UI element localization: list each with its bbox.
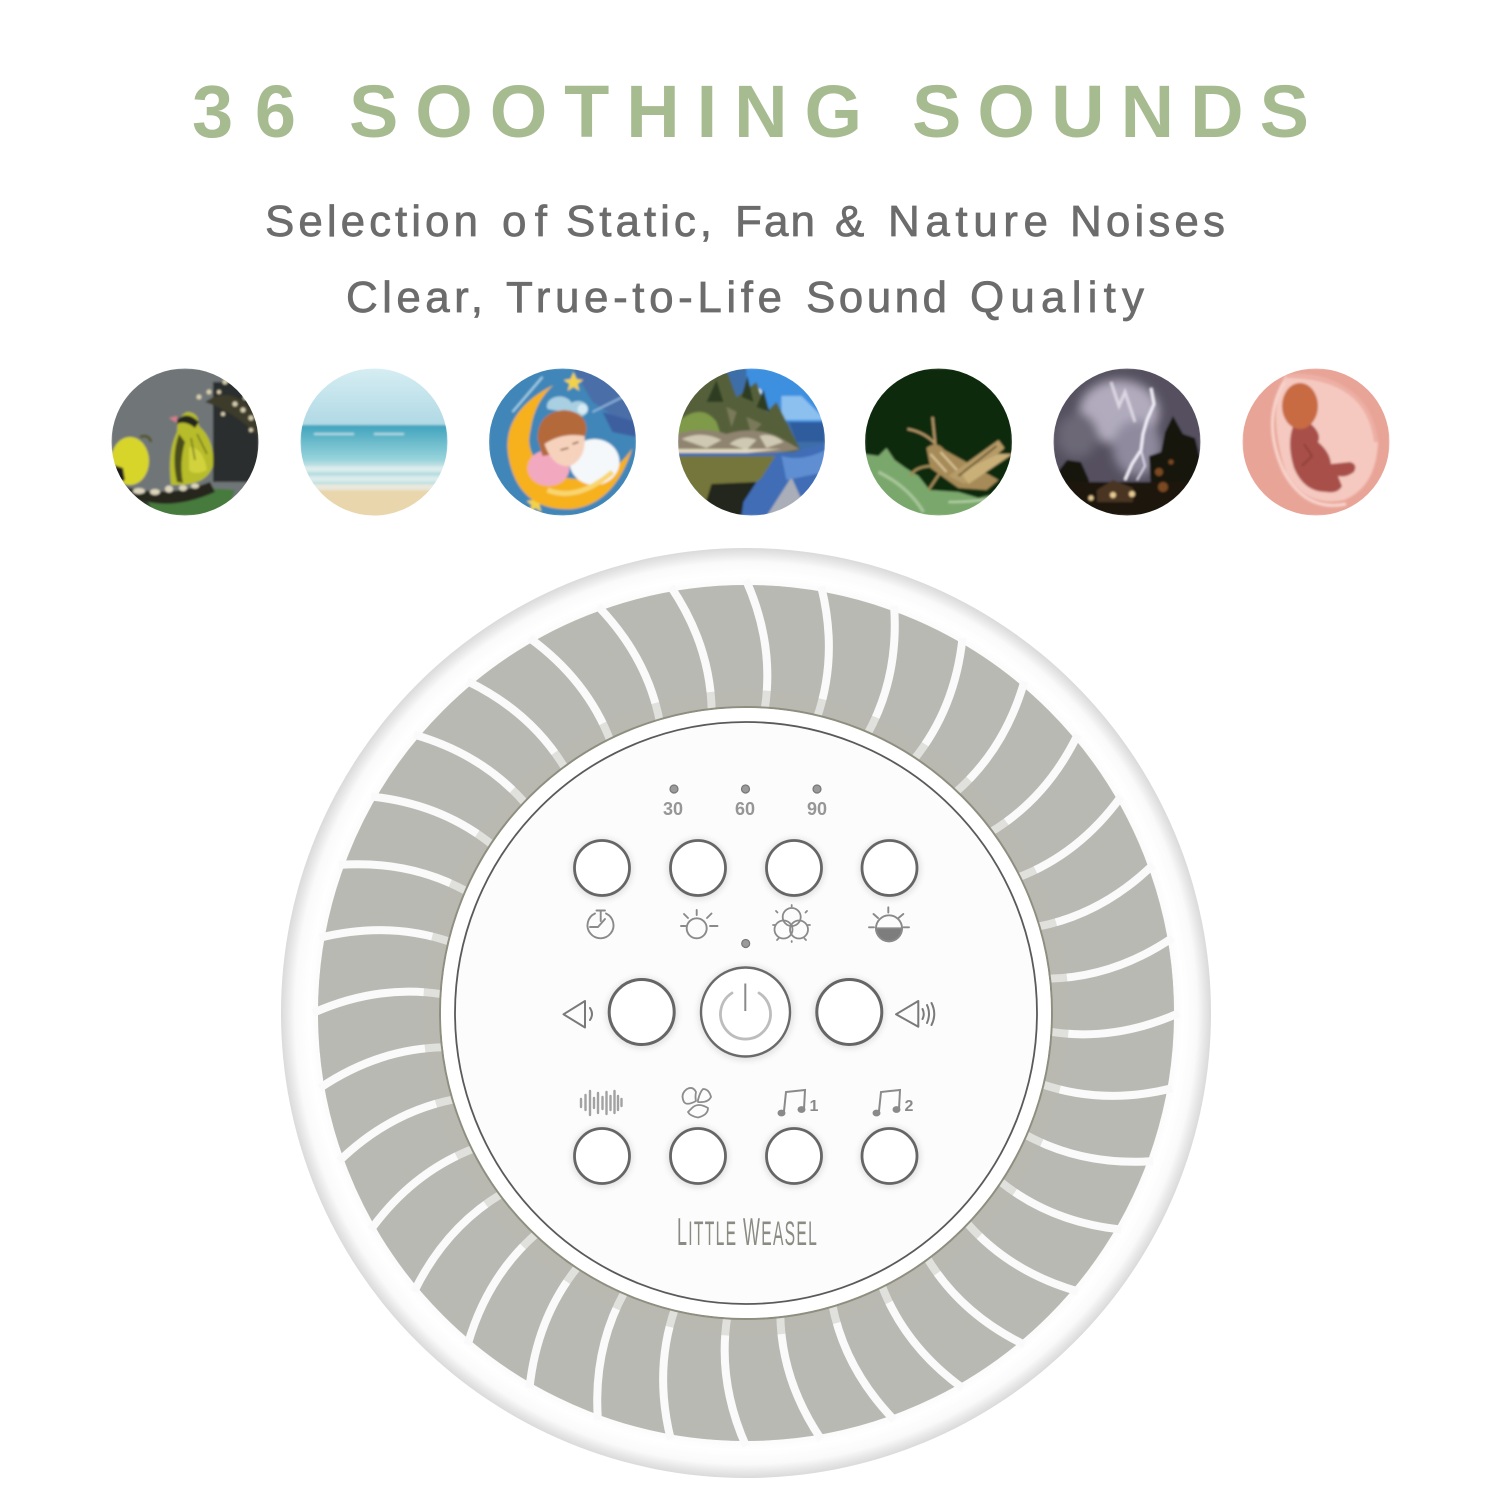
subtitle: selection of noises: Static, xyxy=(566,197,712,246)
subtitle: selection of noises: Fan xyxy=(735,197,815,246)
photo: beach xyxy=(300,368,448,518)
subtitle: sound quality: Quality xyxy=(970,273,1144,322)
icon: sound wave xyxy=(581,1091,622,1115)
timer indicator lights xyxy=(670,785,821,948)
icon: volume down xyxy=(564,1001,592,1028)
product: white noise machine xyxy=(281,548,1211,1478)
icon: fan xyxy=(683,1088,711,1118)
timer labels: 90 xyxy=(807,799,827,819)
top row buttons xyxy=(574,840,917,896)
icon: brightness sun xyxy=(681,910,718,938)
power button xyxy=(701,968,790,1056)
timer labels: 30 xyxy=(663,799,683,819)
photo: baby sleeping on the moon xyxy=(488,368,636,516)
title: SOUNDS xyxy=(912,70,1309,153)
photo: birds xyxy=(111,368,259,516)
icon: music 2: 2 xyxy=(905,1098,914,1115)
timer labels: 60 xyxy=(735,799,755,819)
icon: music 1: 1 xyxy=(810,1098,819,1115)
subtitle: sound quality: Sound xyxy=(806,273,947,322)
title: 36 xyxy=(192,70,296,153)
subtitle: selection of noises xyxy=(265,197,1225,246)
icon: music 2 xyxy=(874,1090,914,1115)
icon: colour circles xyxy=(773,905,810,942)
device body xyxy=(281,548,1211,1478)
photo: grasshopper on leaf xyxy=(864,368,1012,516)
icon: music 1 xyxy=(778,1090,819,1115)
subtitle: selection of noises: Selection xyxy=(265,197,478,246)
brand logo: LITTLE WEASEL xyxy=(677,1212,817,1254)
photo: baby in womb xyxy=(1242,368,1390,516)
control panel xyxy=(441,708,1051,1318)
middle row buttons xyxy=(609,980,882,1044)
subtitle: sound quality: True-to-Life xyxy=(506,273,782,322)
subtitle: sound quality xyxy=(346,273,1144,322)
icon: half sun xyxy=(869,907,909,941)
subtitle: selection of noises: Noises xyxy=(1070,197,1225,246)
subtitle: selection of noises: of xyxy=(502,197,548,246)
icon: timer xyxy=(588,910,614,938)
title: SOOTHING xyxy=(349,70,862,153)
timer labels xyxy=(663,799,827,819)
photo: mountain lake xyxy=(678,368,826,516)
speaker grille xyxy=(313,580,1179,1446)
title xyxy=(192,70,1309,153)
icon: volume up xyxy=(896,1001,934,1027)
button shadows xyxy=(571,838,921,1188)
subtitle: selection of noises: & xyxy=(835,197,864,246)
bottom row buttons xyxy=(574,1128,917,1184)
subtitle: selection of noises: Nature xyxy=(888,197,1048,246)
photo: thunderstorm xyxy=(1053,368,1201,516)
subtitle: sound quality: Clear, xyxy=(346,273,483,322)
